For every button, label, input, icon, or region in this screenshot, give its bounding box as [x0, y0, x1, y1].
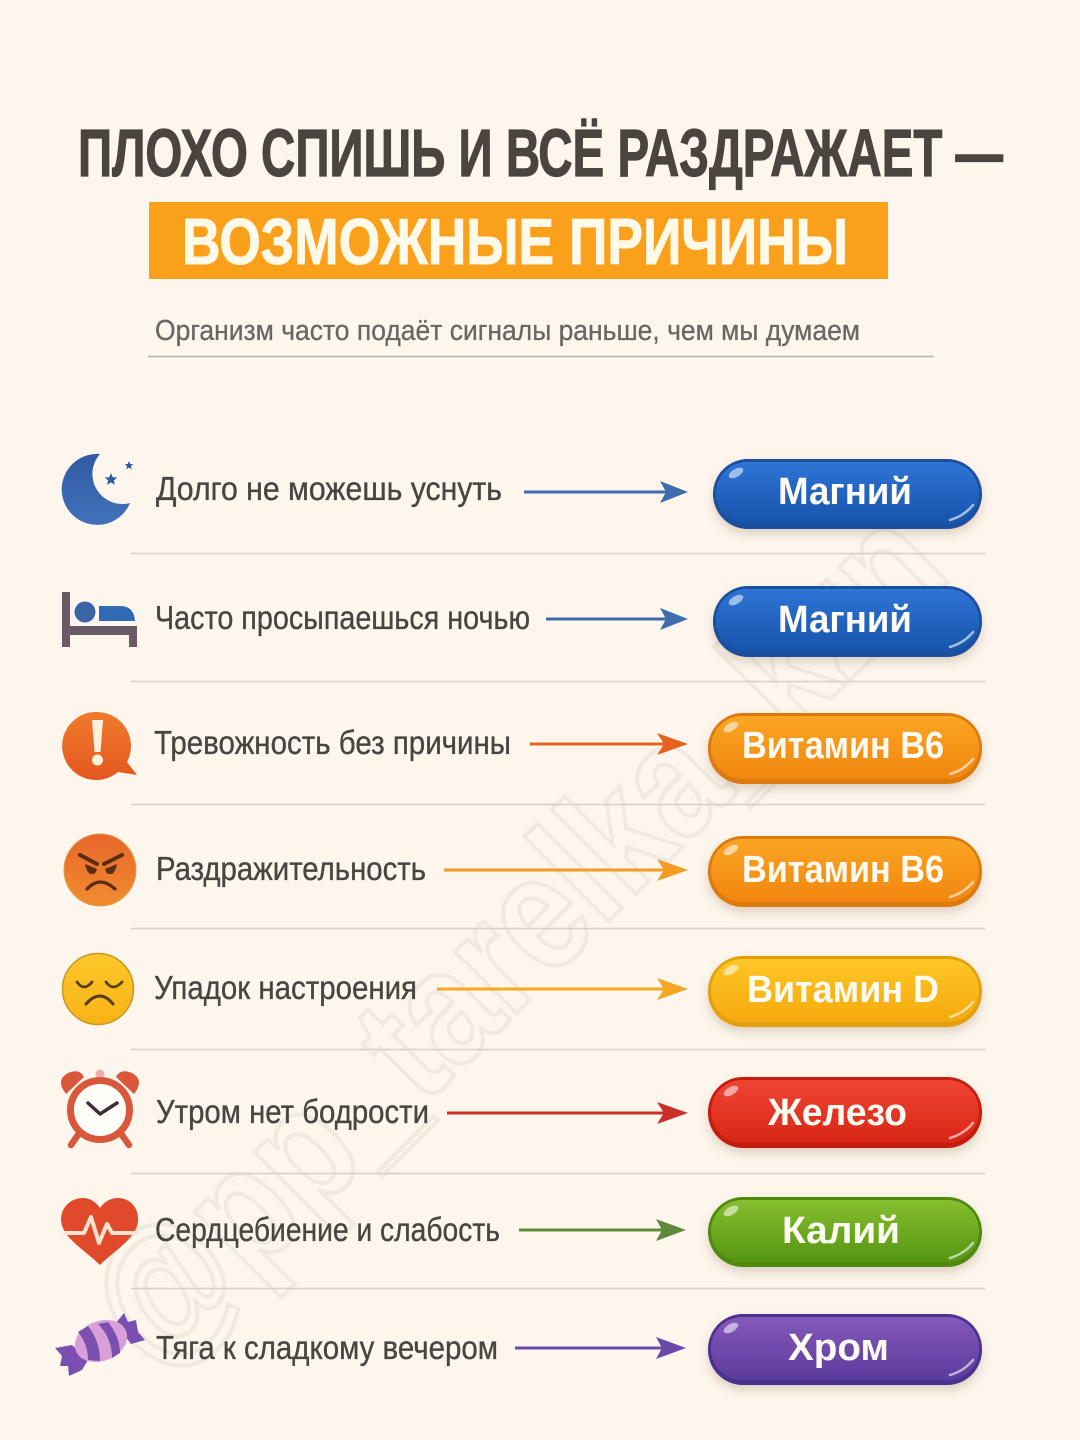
- arrow: [515, 1337, 686, 1359]
- icon: heart with pulse: [61, 1198, 138, 1265]
- icon: alarm clock: [61, 1070, 139, 1145]
- icon: candy: [55, 1312, 145, 1376]
- icon: sad face: [62, 954, 134, 1024]
- pill: magnesium: Магний: [778, 599, 912, 641]
- icon: bed: [62, 592, 137, 647]
- pill: chromium: Хром: [788, 1327, 889, 1369]
- row: sweet cravings: [55, 1312, 982, 1385]
- label: Долго не можешь уснуть: [156, 470, 502, 507]
- pill: iron: Железо: [767, 1092, 907, 1134]
- subtitle: Организм часто подаёт сигналы раньше, чем мы думаем: [155, 315, 860, 347]
- pill: vitamin B6: [708, 836, 982, 907]
- label: Упадок настроения: [154, 969, 417, 1006]
- row: no morning energy: [61, 1070, 982, 1148]
- pill: vitamin B6: Витамин B6: [742, 725, 944, 767]
- label: Тревожность без причины: [154, 724, 511, 761]
- label: Часто просыпаешься ночью: [155, 599, 530, 636]
- label: Тяга к сладкому вечером: [156, 1329, 498, 1366]
- label: Сердцебиение и слабость: [155, 1211, 500, 1248]
- pill: magnesium: [713, 459, 982, 529]
- pill: magnesium: Магний: [778, 471, 912, 513]
- pill: potassium: [708, 1197, 982, 1267]
- pill: vitamin D: Витамин D: [747, 969, 939, 1011]
- arrow: [519, 1219, 686, 1241]
- row: falling asleep: [62, 454, 982, 529]
- pill: chromium: [708, 1314, 982, 1385]
- arrow: [546, 608, 688, 630]
- row: waking at night: [62, 586, 982, 657]
- row: low mood: [62, 954, 982, 1027]
- arrow: [437, 978, 688, 1000]
- pill: magnesium: [713, 586, 982, 657]
- icon: angry face: [64, 834, 136, 906]
- icon: alert bubble: [62, 712, 137, 780]
- row: palpitations: [61, 1197, 982, 1267]
- icon: moon and stars: [62, 454, 133, 525]
- arrow: [444, 859, 688, 881]
- arrow: [524, 481, 688, 503]
- row: anxiety: [62, 712, 982, 784]
- row: irritability: [64, 834, 982, 907]
- label: Утром нет бодрости: [156, 1093, 429, 1130]
- pill: vitamin B6: [708, 713, 982, 784]
- pill: vitamin D: [708, 956, 982, 1027]
- pill: potassium: Калий: [782, 1210, 900, 1252]
- label: Раздражительность: [156, 850, 426, 887]
- arrow: [530, 733, 688, 755]
- pill: iron: [708, 1077, 982, 1148]
- pill: vitamin B6: Витамин B6: [742, 849, 944, 891]
- arrow: [447, 1102, 688, 1124]
- heading banner: ВОЗМОЖНЫЕ ПРИЧИНЫ: [182, 205, 848, 278]
